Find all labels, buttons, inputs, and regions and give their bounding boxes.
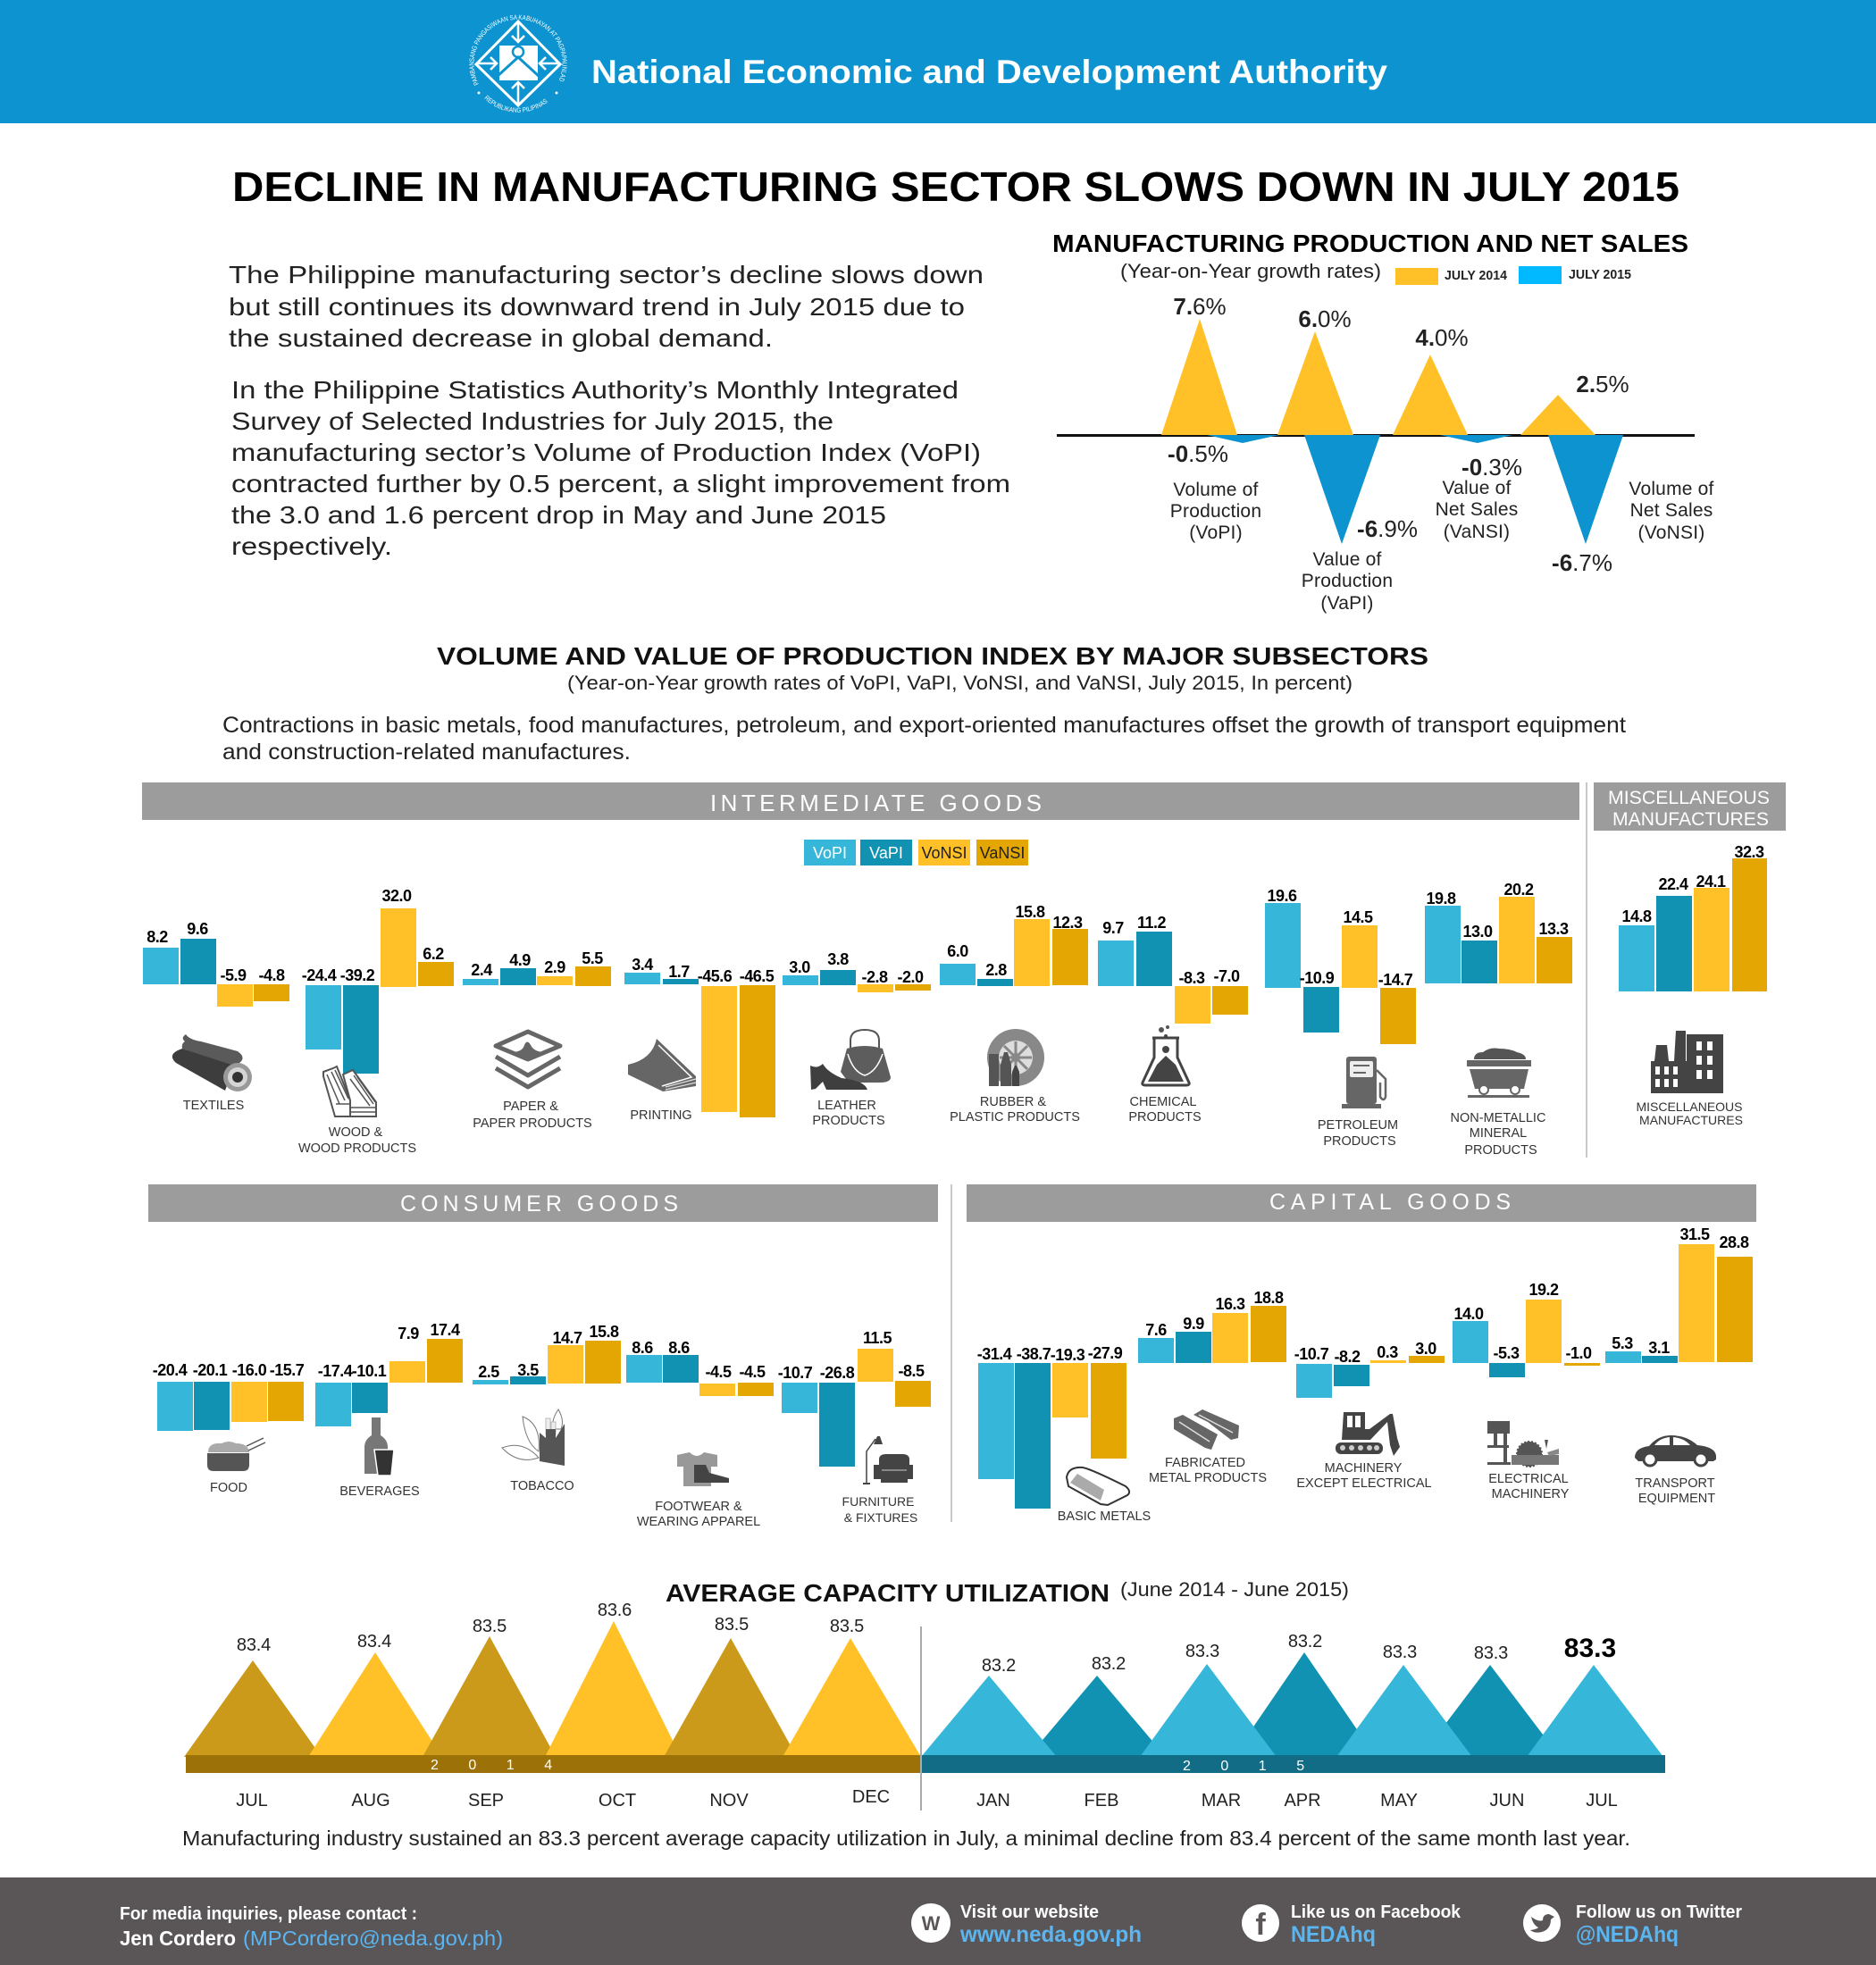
text block: survey details: Survey of Selected Industries for July 2015, the	[231, 407, 833, 435]
year bar: 2015: 2015	[1183, 1759, 1335, 1774]
month labels: SEP	[468, 1791, 504, 1810]
subsector: transport equipment: 31.5	[1679, 1225, 1710, 1243]
percent labels: 6.0%	[1298, 305, 1352, 332]
subsector: fabricated metal products: 9.9	[1183, 1315, 1204, 1333]
value labels: 83.4	[357, 1632, 391, 1651]
percent labels: 2.5%	[1576, 371, 1629, 397]
icon: shirt and boot	[677, 1452, 729, 1486]
subsector: printing: -45.6	[698, 967, 733, 985]
section header	[148, 1184, 938, 1222]
section header: MANUFACTURES	[1612, 809, 1769, 830]
subsector: non-metallic mineral products: 13.3	[1538, 920, 1569, 938]
subsector: food: FOOD	[210, 1481, 247, 1495]
icon: tobacco leaves and pack	[502, 1409, 565, 1466]
subsector: footwear and wearing apparel: 8.6	[668, 1339, 690, 1357]
section header	[967, 1184, 1756, 1222]
subsector: paper and paper products: 2.4	[471, 961, 492, 979]
heading: MANUFACTURING PRODUCTION AND NET SALES	[1052, 230, 1688, 257]
legend: VoPI	[813, 844, 847, 862]
heading: subsectors: VOLUME AND VALUE OF PRODUCTION INDEX BY MAJOR SUBSECTORS	[437, 642, 1428, 670]
subsector: rubber and plastic products: RUBBER &	[980, 1095, 1046, 1109]
icon: paper stack	[496, 1032, 560, 1087]
subsector: leather products: 3.0	[789, 958, 810, 976]
subsector: paper and paper products: 5.5	[582, 949, 603, 967]
bars	[1619, 843, 1767, 991]
label: VoNSI	[1629, 479, 1714, 543]
value labels: 83.2	[1288, 1632, 1322, 1651]
divider	[951, 1184, 952, 1522]
website: www.neda.gov.ph	[959, 1922, 1142, 1947]
subsector: beverages: BEVERAGES	[339, 1484, 420, 1499]
subsector: food: -16.0	[232, 1361, 267, 1379]
label: VoPI	[1170, 480, 1261, 543]
subsector: non-metallic mineral products: NON-METALLIC	[1451, 1111, 1545, 1125]
subsector: basic metals: -31.4	[977, 1345, 1012, 1363]
subsector: wood and wood products: WOOD &	[329, 1125, 383, 1140]
icon: fabric roll	[172, 1034, 252, 1091]
value labels: 83.3	[1383, 1643, 1417, 1662]
icon: excavator	[1336, 1412, 1400, 1456]
bars: 22.4	[1658, 875, 1688, 893]
text block: survey details: In the Philippine Statistics Authority’s Monthly Integrated	[231, 376, 959, 404]
year bar: 2015	[921, 1755, 1665, 1774]
website: Visit our website	[960, 1902, 1099, 1922]
subsector: textiles: -4.8	[258, 966, 285, 984]
subsector: footwear and wearing apparel	[626, 1339, 774, 1529]
subsector: electrical machinery: 19.2	[1528, 1281, 1559, 1299]
subsector: leather products: -2.8	[861, 968, 888, 986]
icon: fuel pump	[1342, 1057, 1386, 1108]
label: MANUFACTURES	[1639, 1113, 1743, 1127]
subsector: wood and wood products	[298, 887, 454, 1156]
media contact: Jen Cordero	[120, 1927, 236, 1950]
subsector: textiles: TEXTILES	[183, 1099, 244, 1113]
panel: miscellaneous manufactures	[1594, 782, 1786, 1127]
text block: survey details: contracted further by 0.5 percent, a slight improvement from	[231, 470, 1010, 498]
month labels: OCT	[599, 1791, 636, 1810]
text block: introduction: The Philippine manufacturing sector’s decline slows down	[229, 261, 984, 288]
icon: rice bowl	[207, 1438, 265, 1471]
facebook	[1242, 1902, 1461, 1947]
percent labels: -0.3%	[1461, 454, 1522, 481]
subsector: chemical products: -7.0	[1213, 967, 1240, 985]
value labels: 83.5	[473, 1617, 507, 1636]
month labels: MAY	[1380, 1791, 1418, 1810]
icon: drill press and saw	[1487, 1421, 1559, 1467]
subsector: electrical machinery: 14.0	[1453, 1305, 1484, 1323]
subsector: wood and wood products: -24.4	[302, 966, 337, 984]
bars: 32.3	[1734, 843, 1764, 861]
media contact: For media inquiries, please contact :	[120, 1904, 417, 1924]
subsector: transport equipment: 28.8	[1719, 1233, 1749, 1251]
heading: subsectors	[437, 642, 1428, 694]
icon: armchair and lamp	[863, 1436, 913, 1484]
subsector: rubber and plastic products: 15.8	[1015, 903, 1045, 921]
subsector: wood and wood products: 6.2	[423, 945, 444, 963]
subsector: leather products	[783, 950, 931, 1128]
label: VaNSI: (VaNSI)	[1444, 522, 1510, 542]
twitter	[1523, 1902, 1742, 1947]
subsector: leather products: LEATHER	[817, 1099, 876, 1113]
icon: facebook	[1242, 1904, 1279, 1942]
text block: survey details: respectively.	[231, 532, 392, 560]
subsector: beverages: -17.4	[318, 1362, 353, 1380]
chart: 2015 triangles	[921, 1652, 1663, 1757]
subsector: furniture and fixtures: -8.5	[898, 1362, 925, 1380]
icon: car	[1635, 1435, 1716, 1466]
subsector: chemical products	[1098, 914, 1248, 1125]
subsector: printing: 3.4	[632, 956, 653, 974]
subsector: machinery except electrical: 0.3	[1377, 1343, 1398, 1361]
twitter: Follow us on Twitter	[1576, 1902, 1742, 1922]
legend	[1395, 266, 1631, 285]
subsector: furniture and fixtures: 11.5	[863, 1329, 892, 1347]
label: VoNSI: Net Sales	[1630, 500, 1713, 521]
subsector: paper and paper products: 2.9	[544, 958, 565, 976]
subsector: fabricated metal products: 18.8	[1253, 1289, 1284, 1307]
icon: web	[911, 1903, 951, 1943]
subheading: (Year-on-Year growth rates of VoPI, VaPI, VoNSI, and VaNSI, July 2015, In percent)	[567, 672, 1353, 694]
subsector: textiles: 9.6	[187, 920, 208, 938]
label	[1636, 1100, 1743, 1127]
subsector: petroleum products: -14.7	[1378, 971, 1413, 989]
label: VoNSI: Volume of	[1629, 479, 1714, 499]
subheading: (June 2014 - June 2015)	[1120, 1578, 1349, 1601]
subsector: footwear and wearing apparel: FOOTWEAR &	[655, 1500, 742, 1514]
title: DECLINE IN MANUFACTURING SECTOR SLOWS DOWN IN JULY 2015	[232, 163, 1679, 210]
month labels: JAN	[976, 1791, 1010, 1810]
value labels: 83.5	[830, 1617, 864, 1636]
subsector: tobacco: 15.8	[589, 1323, 619, 1341]
subsector: footwear and wearing apparel: -4.5	[739, 1363, 766, 1381]
subsector: petroleum products: -10.9	[1300, 969, 1335, 987]
bars: 24.1	[1696, 873, 1726, 891]
subsector: fabricated metal products: 7.6	[1145, 1321, 1167, 1339]
media contact: (MPCordero@neda.gov.ph)	[243, 1927, 503, 1950]
value labels: 83.5	[715, 1615, 749, 1635]
subsector: petroleum products: 19.6	[1267, 887, 1297, 905]
month labels	[236, 1787, 1618, 1810]
month labels: JUN	[1490, 1791, 1524, 1810]
section header: MISCELLANEOUS	[1608, 788, 1770, 808]
label: VaPI: Value of	[1312, 549, 1382, 570]
media contact	[120, 1904, 503, 1950]
subsector: wood and wood products: WOOD PRODUCTS	[298, 1141, 416, 1156]
subsector: paper and paper products: 4.9	[509, 951, 531, 969]
percent labels	[1168, 293, 1629, 576]
subsector: printing	[624, 956, 775, 1123]
subsector: electrical machinery	[1453, 1281, 1600, 1501]
panel: intermediate goods	[142, 782, 1579, 1158]
legend: VaPI	[869, 844, 903, 862]
label: VoPI: Production	[1170, 501, 1261, 522]
subsector: wood and wood products: -39.2	[340, 966, 375, 984]
value labels: 83.4	[237, 1635, 271, 1655]
value labels: 83.6	[598, 1601, 632, 1620]
twitter: @NEDAhq	[1576, 1922, 1679, 1947]
subsector: non-metallic mineral products: MINERAL	[1470, 1126, 1527, 1141]
label: MISCELLANEOUS	[1636, 1100, 1743, 1114]
legend: VaNSI	[980, 844, 1025, 862]
subsector: basic metals: BASIC METALS	[1058, 1509, 1151, 1524]
chart: triangles	[1057, 319, 1695, 544]
year bar: 2014: 2014	[431, 1758, 582, 1773]
subsector: electrical machinery: -5.3	[1493, 1344, 1520, 1362]
icon: flask	[1143, 1025, 1189, 1085]
icon: NEDA logo: REPUBLIKANG PILIPINAS	[484, 95, 547, 113]
subsector: food	[153, 1361, 305, 1495]
icon: bottle and glass	[364, 1417, 394, 1476]
subsector: paper and paper products: PAPER &	[503, 1100, 558, 1114]
month labels: JUL	[1586, 1791, 1618, 1810]
subsector: transport equipment	[1605, 1225, 1753, 1506]
subsector: printing: -46.5	[740, 967, 775, 985]
subsector: tobacco: 2.5	[478, 1363, 499, 1381]
website	[911, 1902, 1142, 1947]
subsector: food: -20.4	[153, 1361, 188, 1379]
section header	[142, 782, 1579, 820]
subsector: food: -15.7	[270, 1361, 305, 1379]
section header	[1594, 782, 1786, 831]
text block: survey details: manufacturing sector’s Volume of Production Index (VoPI)	[231, 439, 981, 466]
legend	[804, 840, 1028, 865]
text block: contractions	[222, 713, 1626, 765]
caption: Manufacturing industry sustained an 83.3 percent average capacity utilization in July, a minimal decline from 83.4 percent of the same month last year.	[182, 1827, 1630, 1850]
section header: CONSUMER GOODS	[400, 1192, 678, 1217]
heading: AVERAGE CAPACITY UTILIZATION	[666, 1579, 1110, 1607]
subsector: chemical products: 11.2	[1137, 914, 1167, 932]
subsector: basic metals: -19.3	[1051, 1346, 1085, 1364]
value labels: 83.2	[1092, 1654, 1126, 1674]
percent labels: 4.0%	[1415, 324, 1469, 351]
subsector: footwear and wearing apparel: WEARING APPAREL	[637, 1515, 760, 1529]
subsector: basic metals	[977, 1344, 1151, 1524]
subsector: petroleum products: PRODUCTS	[1323, 1134, 1396, 1149]
text block: introduction: but still continues its downward trend in July 2015 due to	[229, 293, 965, 321]
subsector: non-metallic mineral products	[1425, 881, 1572, 1158]
percent labels: -0.5%	[1168, 440, 1228, 467]
subheading: (Year-on-Year growth rates)	[1120, 260, 1381, 282]
subsector: food: -20.1	[193, 1361, 228, 1379]
subsector: electrical machinery: MACHINERY	[1492, 1487, 1570, 1501]
subsector: transport equipment: 3.1	[1648, 1339, 1670, 1357]
month labels: APR	[1284, 1791, 1321, 1810]
subsector: non-metallic mineral products: 13.0	[1462, 923, 1493, 941]
value labels: 83.3	[1474, 1643, 1508, 1663]
subsector: furniture and fixtures: FURNITURE	[842, 1494, 914, 1509]
text block: survey details: the 3.0 and 1.6 percent drop in May and June 2015	[231, 501, 886, 529]
icon: tyre and bottles	[987, 1029, 1044, 1086]
subsector: textiles: 8.2	[147, 928, 168, 946]
subsector: machinery except electrical: -10.7	[1294, 1345, 1329, 1363]
icon: metal ingot	[1067, 1467, 1129, 1505]
label: VaNSI: Value of	[1442, 478, 1512, 498]
divider	[1586, 782, 1587, 1158]
subsector: footwear and wearing apparel: -4.5	[705, 1363, 732, 1381]
subsector: leather products: -2.0	[897, 968, 924, 986]
subsector: printing: 1.7	[668, 963, 690, 981]
subsector: electrical machinery: -1.0	[1565, 1344, 1592, 1362]
panel: consumer goods	[148, 1184, 938, 1529]
panel: manufacturing production and net sales	[1052, 230, 1714, 614]
month labels: JUL	[236, 1791, 268, 1810]
subsector: rubber and plastic products: 6.0	[947, 942, 968, 960]
icon: web: W	[922, 1912, 941, 1935]
label: VaNSI: Net Sales	[1436, 499, 1518, 520]
subsector: tobacco: 3.5	[517, 1361, 539, 1379]
subsector: fabricated metal products: 16.3	[1215, 1295, 1245, 1313]
legend: JULY 2015	[1569, 267, 1631, 282]
month labels: MAR	[1202, 1791, 1241, 1810]
legend: VoNSI	[921, 844, 967, 862]
section header: CAPITAL GOODS	[1269, 1190, 1511, 1215]
subsector: electrical machinery: ELECTRICAL	[1488, 1472, 1569, 1486]
subsector: paper and paper products	[463, 949, 611, 1131]
footer band	[0, 1877, 1876, 1965]
subsector: non-metallic mineral products: 19.8	[1426, 890, 1456, 907]
value labels: 83.3	[1185, 1642, 1219, 1661]
subsector: fabricated metal products: METAL PRODUCTS	[1149, 1471, 1267, 1485]
value labels: 83.3	[1564, 1634, 1616, 1663]
icon: NEDA logo: PAMBANSANG PANGASIWAAN SA KABUHAYAN AT PAGPAPAUNLAD	[469, 14, 567, 86]
subsector: rubber and plastic products: PLASTIC PRODUCTS	[950, 1110, 1080, 1125]
percent labels: 7.6%	[1173, 293, 1227, 320]
subsector: furniture and fixtures	[778, 1329, 931, 1525]
bars: 14.8	[1621, 907, 1652, 925]
facebook: NEDAhq	[1291, 1922, 1376, 1947]
month labels: FEB	[1085, 1791, 1118, 1810]
subsector: footwear and wearing apparel: 8.6	[632, 1339, 653, 1357]
icon: ore cart	[1467, 1049, 1531, 1098]
subsector: fabricated metal products: FABRICATED	[1165, 1456, 1245, 1470]
subsector: transport equipment: 5.3	[1612, 1334, 1633, 1352]
label: VoPI: Volume of	[1173, 480, 1259, 500]
subsector: transport equipment: TRANSPORT	[1635, 1476, 1715, 1491]
subsector: machinery except electrical: EXCEPT ELECTRICAL	[1296, 1476, 1432, 1491]
subsector: leather products: 3.8	[827, 950, 849, 968]
subsector: beverages: 7.9	[398, 1325, 419, 1342]
icon: steel beams	[1174, 1409, 1239, 1450]
label: VoNSI: (VoNSI)	[1638, 523, 1704, 543]
icon: factory	[1651, 1031, 1723, 1093]
subsector: machinery except electrical: MACHINERY	[1325, 1461, 1403, 1476]
subsector: textiles	[143, 920, 289, 1113]
subsector: chemical products: 9.7	[1102, 919, 1124, 937]
text block: contractions: and construction-related manufactures.	[222, 740, 631, 765]
value labels	[237, 1601, 1616, 1676]
subsector: tobacco	[473, 1323, 621, 1493]
label: VoPI: (VoPI)	[1189, 523, 1243, 543]
subsector: tobacco: TOBACCO	[510, 1479, 574, 1493]
panel: capital goods	[967, 1184, 1756, 1524]
subsector: rubber and plastic products: 12.3	[1052, 914, 1083, 932]
organisation name: National Economic and Development Authority	[591, 54, 1387, 90]
facebook: Like us on Facebook	[1291, 1902, 1461, 1922]
subsector: beverages: 17.4	[430, 1321, 460, 1339]
subsector: machinery except electrical: 3.0	[1415, 1340, 1436, 1358]
subsector: textiles: -5.9	[220, 966, 247, 984]
subsector: petroleum products: 14.5	[1343, 908, 1373, 926]
subsector: rubber and plastic products	[940, 903, 1088, 1125]
panel: average capacity utilization	[182, 1578, 1665, 1850]
subsector: basic metals: -27.9	[1088, 1344, 1123, 1362]
chart: 2014 triangles	[184, 1621, 921, 1757]
subsector: petroleum products	[1265, 887, 1416, 1149]
label: VaPI: (VaPI)	[1320, 593, 1374, 614]
month labels: NOV	[709, 1791, 749, 1810]
label: VaPI: Production	[1302, 571, 1393, 591]
icon: handbag and shoe	[810, 1030, 891, 1090]
subsector: chemical products: PRODUCTS	[1128, 1110, 1202, 1125]
subsector: furniture and fixtures: & FIXTURES	[844, 1510, 917, 1525]
icon: printed magazine	[628, 1039, 696, 1091]
subsector: fabricated metal products	[1138, 1289, 1286, 1485]
text block: contractions: Contractions in basic metals, food manufactures, petroleum, and export-oriented manufactures offset the growth of transport equipment	[222, 713, 1626, 738]
label: VaPI	[1302, 549, 1393, 614]
subsector: petroleum products: PETROLEUM	[1318, 1118, 1398, 1133]
subsector: non-metallic mineral products: PRODUCTS	[1464, 1143, 1537, 1158]
year bar: 2014	[186, 1755, 921, 1773]
subsector: non-metallic mineral products: 20.2	[1503, 881, 1534, 899]
subsector: transport equipment: EQUIPMENT	[1638, 1492, 1715, 1506]
text block: introduction: the sustained decrease in global demand.	[229, 324, 773, 352]
percent labels: -6.9%	[1357, 515, 1418, 542]
subsector: beverages	[315, 1321, 463, 1499]
subsector: rubber and plastic products: 2.8	[985, 961, 1007, 979]
text block: introduction	[229, 261, 984, 352]
icon: twitter	[1523, 1904, 1561, 1942]
subsector: chemical products: -8.3	[1178, 969, 1205, 987]
divider	[920, 1626, 922, 1810]
subsector: basic metals: -38.7	[1017, 1345, 1051, 1363]
subsector: furniture and fixtures: -26.8	[820, 1364, 855, 1382]
legend: JULY 2014	[1445, 268, 1508, 283]
subsector: wood and wood products: 32.0	[381, 887, 412, 905]
subsector: furniture and fixtures: -10.7	[778, 1364, 813, 1382]
section header: INTERMEDIATE GOODS	[710, 790, 1042, 816]
value labels: 83.2	[982, 1656, 1016, 1676]
icon: facebook: f	[1255, 1908, 1266, 1942]
text block: survey details	[231, 376, 1010, 560]
subsector: leather products: PRODUCTS	[812, 1114, 885, 1128]
subsector: machinery except electrical: -8.2	[1334, 1348, 1361, 1366]
label: VaNSI	[1436, 478, 1518, 542]
month labels: AUG	[351, 1791, 390, 1810]
subsector: chemical products: CHEMICAL	[1130, 1095, 1196, 1109]
subsector: machinery except electrical	[1294, 1340, 1445, 1491]
icon: lumber	[323, 1066, 376, 1116]
subsector: tobacco: 14.7	[552, 1329, 582, 1347]
subsector: paper and paper products: PAPER PRODUCTS	[473, 1116, 592, 1131]
month labels: DEC	[852, 1787, 890, 1807]
subsector: printing: PRINTING	[630, 1108, 692, 1123]
subsector: beverages: -10.1	[352, 1362, 387, 1380]
header band	[0, 0, 1876, 123]
percent labels: -6.7%	[1552, 549, 1612, 576]
